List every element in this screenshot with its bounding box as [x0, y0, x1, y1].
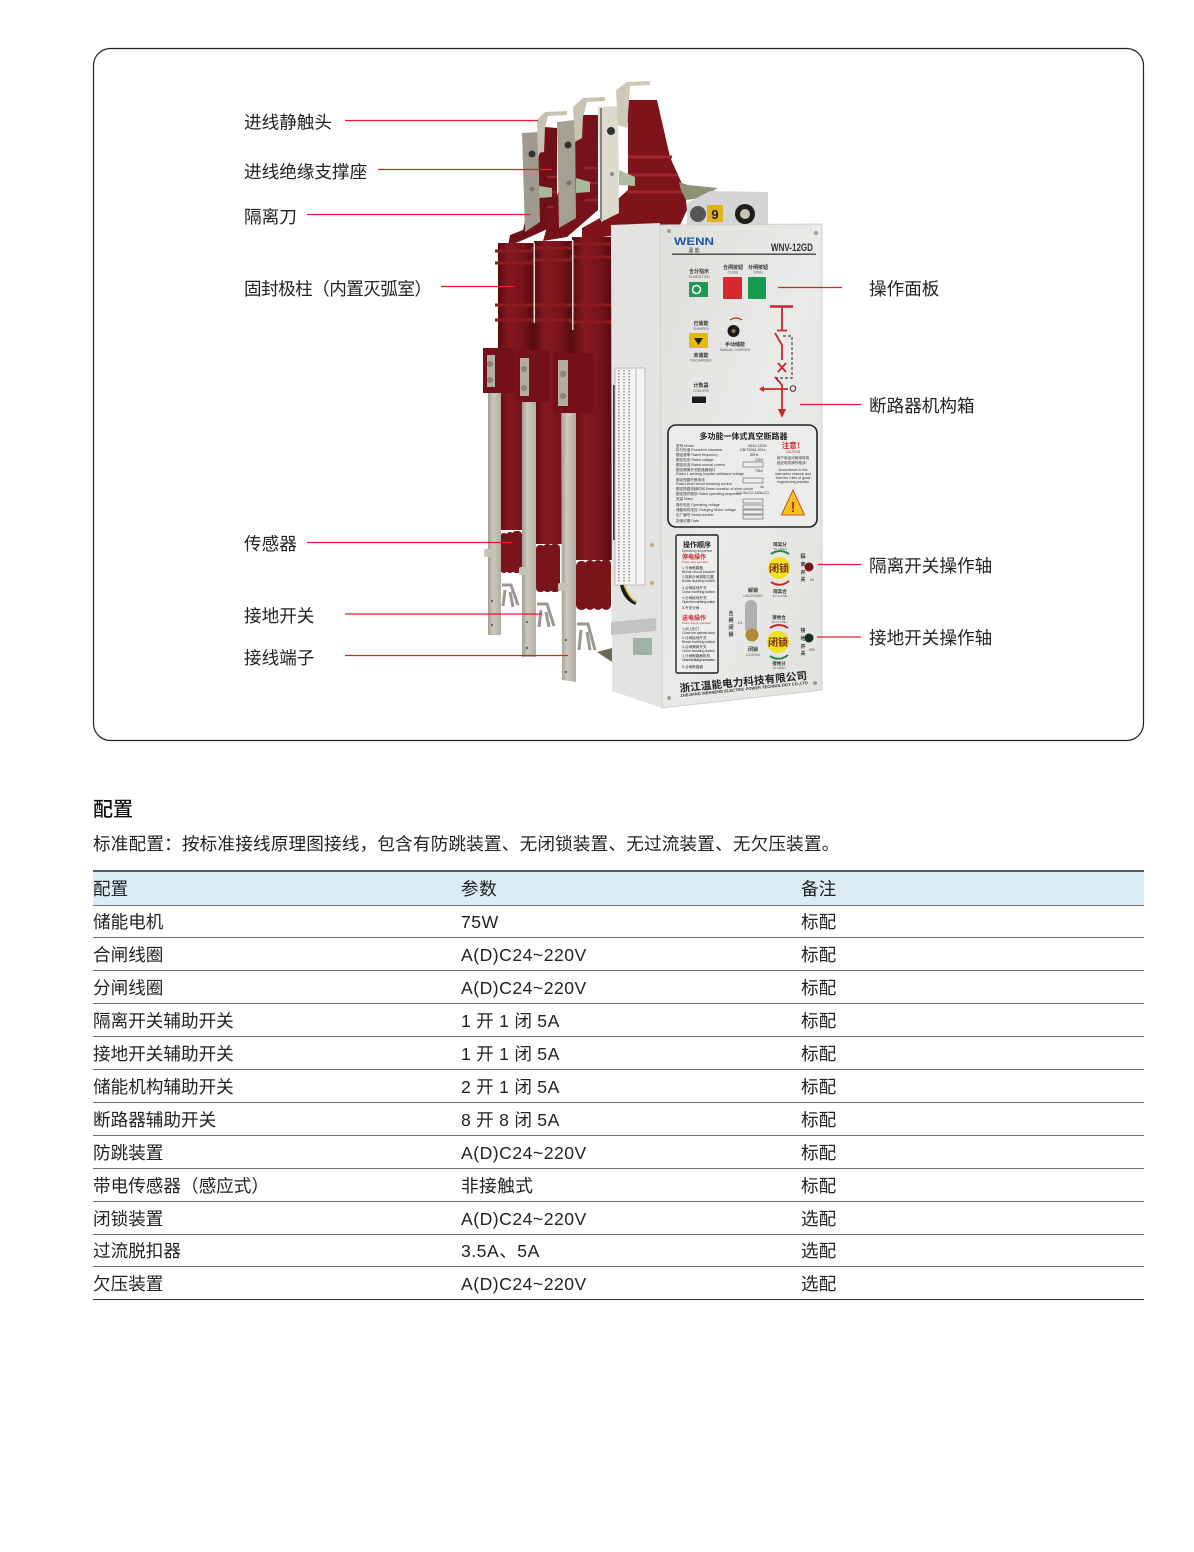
counter: 计数器 [693, 382, 709, 389]
closing interlock: LOCKING [746, 653, 761, 657]
row: 带电传感器: 非接触式 [461, 1176, 533, 1196]
nameplate: 50Hz [750, 453, 759, 457]
nameplate: 用户电话可使用现场 [777, 455, 810, 460]
operating sequence box: 4.分闸断路器机构 [682, 653, 711, 658]
operating sequence box: 3.合闸隔离开关 [682, 644, 707, 649]
nameplate: 额定短路持续时间 Rated duration of short circuit [676, 486, 753, 491]
nameplate: Accordance to the [779, 468, 807, 472]
nameplate: WNV-12GD [748, 444, 767, 448]
row: 储能机构辅助开关: 2 开 1 闭 5A [461, 1077, 560, 1097]
row: 合闸线圈: 标配 [801, 945, 836, 965]
operating sequence box: Operating sequence [682, 549, 712, 553]
callout: 接地开关操作轴: 接地开关操作轴 [869, 628, 992, 648]
earthing switch lock: TO OPEN [772, 666, 786, 670]
bellows sensor 1 [500, 531, 522, 573]
pole 3 [570, 81, 687, 610]
nameplate: 12kV [755, 458, 764, 462]
earthing switch lock: 接地合 [772, 614, 786, 621]
back plate with top knobs: 9 [711, 207, 719, 222]
model number: WNV-12GD [771, 242, 813, 254]
nameplate: 额定隔离开关断路器端口 [676, 467, 716, 472]
callout: 隔离刀: 隔离刀 [244, 207, 297, 227]
operating sequence box: 4.分闸接地开关 [682, 595, 707, 600]
row: 储能电机: 75W [461, 912, 499, 932]
manual charge knob: 手动储能 [725, 341, 745, 348]
isolating switch lock: 隔 [800, 553, 806, 560]
operating sequence box: 2.摇转分闸钥匙位置 [682, 574, 714, 579]
row: 接地开关辅助开关: 接地开关辅助开关 [93, 1044, 234, 1064]
heading: 配置: 配置 [93, 799, 133, 821]
counter [692, 382, 710, 403]
row: 闭锁装置: A(D)C24~220V [461, 1209, 587, 1229]
row: 合闸线圈: A(D)C24~220V [461, 945, 587, 965]
callout: 隔离开关操作轴: 隔离开关操作轴 [869, 556, 992, 576]
row: 防跳装置: A(D)C24~220V [461, 1143, 587, 1163]
charge indicator: DISCHARGED [690, 358, 712, 362]
back plate with top knobs [679, 182, 768, 226]
row: 过流脱扣器: 过流脱扣器 [93, 1241, 181, 1261]
charge indicator: CHARGED [693, 327, 710, 331]
callout: 断路器机构箱: 断路器机构箱 [869, 396, 975, 416]
row: 接地开关辅助开关: 1 开 1 闭 5A [461, 1044, 560, 1064]
row: 带电传感器: 标配 [801, 1176, 836, 1196]
isolating switch lock: 隔离分 [773, 541, 787, 548]
operating sequence box: Power stop operation [682, 560, 709, 564]
nameplate: instruction manual and [775, 472, 811, 476]
isolating switch lock [768, 541, 814, 598]
nameplate: 额定操作顺序 Rated operating sequence [676, 491, 741, 496]
operating sequence box [676, 535, 718, 673]
callout: 操作面板: 操作面板 [869, 279, 939, 299]
row: 闭锁装置: 选配 [801, 1209, 836, 1229]
nameplate [668, 425, 817, 527]
operating sequence box: Break isolating switch [682, 579, 715, 583]
manual charge knob: MANUAL CHARGED [720, 348, 751, 352]
pole 1 [495, 111, 567, 573]
operating sequence box: 3.合闸接地开关 [682, 585, 707, 590]
earthing switch lock: 接 [800, 627, 806, 634]
closing interlock: C1 [737, 620, 743, 625]
row: 储能电机: 储能电机 [93, 912, 163, 932]
indicator and buttons [688, 264, 768, 299]
isolating switch lock: TO CLOSE [772, 594, 788, 598]
isolating switch lock: 隔离合 [773, 588, 787, 595]
nameplate: 额定短路开断电流 [676, 477, 705, 482]
row: 隔离开关辅助开关: 隔离开关辅助开关 [93, 1011, 234, 1031]
closing interlock: 合 [728, 610, 734, 617]
nameplate: 质量 Mass [676, 496, 693, 501]
row: 断路器辅助开关: 断路器辅助开关 [93, 1110, 216, 1130]
nameplate: 储能电机电压 Charging Motor voltage [676, 507, 736, 512]
operating sequence box: Power supply operation [682, 621, 712, 625]
nameplate: 额定电压 Rated voltage [676, 457, 714, 462]
charge indicator: 未储能 [693, 352, 709, 359]
nameplate: 操作电压 Operating voltage [676, 502, 720, 507]
company name: ZHEJIANG WEHNENG ELECTRIC POWER TECHNOLOGY CO.,LTD [680, 680, 808, 698]
indicator and buttons: 合闸按钮 [723, 264, 743, 271]
earthing switch lock: 关 [800, 650, 806, 657]
operating sequence box: Close earthing switch [682, 590, 715, 594]
nameplate: 75kV [755, 469, 764, 473]
operating sequence box: Close isolating switch [682, 649, 715, 653]
row: 断路器辅助开关 [93, 1103, 1144, 1136]
row: 隔离开关辅助开关 [93, 1004, 1144, 1037]
nameplate: 出厂编号 Serial number [676, 512, 715, 517]
terminal strip and side plate [597, 223, 662, 708]
row: 隔离开关辅助开关: 1 开 1 闭 5A [461, 1011, 560, 1031]
logo: 温 能 [688, 247, 700, 254]
charge indicator: 已储能 [693, 320, 709, 327]
row: 隔离开关辅助开关: 标配 [801, 1011, 836, 1031]
company name: 浙江温能电力科技有限公司 [679, 669, 808, 695]
callout: 进线绝缘支撑座: 进线绝缘支撑座 [244, 162, 367, 182]
table header: 配置 [93, 879, 128, 899]
operating sequence box: Break earthing switch [682, 640, 715, 644]
nameplate: CAUTION [786, 450, 801, 454]
logo: WENN [674, 236, 714, 248]
operating sequence box: 1.闭上柜门 [682, 626, 700, 631]
operating sequence box: Close the cabinet door [682, 631, 716, 635]
text block: standard configuration: 标准配置：按标准接线原理图接线，包含有防跳装置、无闭锁装置、无过流装置、无欠压装置。 [93, 834, 840, 854]
nameplate: O-0.3s-CO-180s-CO [736, 491, 769, 495]
operating sequence box: 5.开关分闸 [682, 605, 700, 610]
closing interlock: 解锁 [748, 587, 758, 594]
callout: 固封极柱: 固封极柱（内置灭弧室） [244, 279, 432, 299]
closing interlock [728, 587, 763, 657]
row: 储能机构辅助开关 [93, 1070, 1144, 1103]
row: 欠压装置: A(D)C24~220V [461, 1274, 587, 1294]
nameplate: 指定电机操作程序！ [777, 460, 809, 465]
earthing switch lock: 地 [800, 635, 806, 642]
panel frame [94, 48, 1144, 740]
operating sequence box: 送电操作 [682, 614, 706, 622]
callout: 进线静触头: 进线静触头 [244, 112, 332, 132]
row: 带电传感器: 带电传感器（感应式） [93, 1176, 269, 1196]
row: 分闸线圈 [93, 971, 1144, 1004]
single-line schematic [759, 306, 796, 418]
row: 断路器辅助开关: 标配 [801, 1110, 836, 1130]
nameplate: 多功能一体式真空断路器 [700, 431, 788, 441]
row: 接地开关辅助开关: 标配 [801, 1044, 836, 1064]
row: 合闸线圈 [93, 938, 1144, 971]
table header: 参数 [461, 879, 497, 899]
row: 储能电机 [93, 905, 1144, 938]
counter: COUNTER [693, 389, 710, 393]
closing interlock: 闭 [728, 624, 734, 631]
row: 断路器辅助开关: 8 开 8 闭 5A [461, 1110, 560, 1130]
row: 闭锁装置: 闭锁装置 [93, 1209, 163, 1229]
earthing switch lock: TO CLOSE [771, 620, 787, 624]
nameplate: ! [790, 499, 796, 516]
row: 过流脱扣器 [93, 1234, 1144, 1267]
earthing switch lock: 开 [800, 644, 806, 650]
bellows sensor 3 [576, 559, 611, 610]
row: 欠压装置: 选配 [801, 1274, 836, 1294]
pole 2 [531, 97, 605, 592]
bellows sensor 2 [536, 544, 560, 592]
row: 储能电机: 标配 [801, 912, 836, 932]
isolating switch lock: 开 [800, 570, 806, 576]
indicator and buttons: 分闸按钮 [748, 264, 768, 271]
earthing switch lock: 接地分 [772, 660, 786, 667]
earthing switch lock [767, 614, 815, 670]
isolating switch lock: 离 [800, 561, 806, 568]
closing interlock: UNLOCKING [744, 594, 763, 598]
nameplate: 额定频率 Rated frequency [676, 452, 718, 457]
row: 欠压装置: 欠压装置 [93, 1274, 163, 1294]
row: 欠压装置 [93, 1267, 1144, 1300]
nameplate: GB/T1984-2014 [740, 448, 766, 452]
charge indicator [689, 320, 712, 362]
busbars and clamps [483, 348, 595, 682]
nameplate: 注意！ [782, 440, 804, 450]
operating sequence box: Open the earthing switch [682, 600, 715, 604]
operating sequence box: 5.合闸断路器 [682, 664, 703, 669]
operating sequence box: 2.分闸接地开关 [682, 635, 707, 640]
nameplate: Rated 1 sensing impulse withstand voltage [676, 472, 744, 476]
illustration: vacuum circuit breaker [483, 81, 822, 708]
isolating switch lock: 闭锁 [769, 562, 789, 575]
row: 过流脱扣器: 选配 [801, 1241, 836, 1261]
operating sequence box: 操作顺序 [683, 540, 711, 549]
row: 分闸线圈: A(D)C24~220V [461, 978, 587, 998]
logo [674, 236, 714, 254]
panel: product diagram [92, 48, 1144, 742]
earthing switch lock: 闭锁 [768, 636, 788, 649]
indicator and buttons: OPEN [753, 270, 763, 274]
isolating switch lock: TO OPEN [773, 547, 787, 551]
row: 防跳装置: 防跳装置 [93, 1143, 163, 1163]
indicator and buttons: CLOSE [728, 270, 738, 274]
row: 储能机构辅助开关: 储能机构辅助开关 [93, 1077, 234, 1097]
operating sequence box: Close the driving mechanism [682, 658, 715, 662]
nameplate: 执行标准 Executive standard [676, 447, 722, 452]
isolating switch lock: IS [810, 577, 814, 582]
indicator and buttons: 合分指示 [689, 268, 709, 275]
nameplate: 4s [760, 485, 764, 489]
row: 分闸线圈: 分闸线圈 [93, 978, 163, 998]
row: 带电传感器 [93, 1169, 1144, 1202]
row: 防跳装置 [93, 1136, 1144, 1169]
nameplate: Rated short circuit breaking current [676, 482, 732, 486]
nameplate: engineering practice [777, 480, 809, 484]
row: 防跳装置: 标配 [801, 1143, 836, 1163]
operating sequence box: 停电操作 [682, 553, 706, 561]
closing interlock: 闸 [728, 617, 734, 624]
operating sequence box: 1.分闸断路器 [682, 565, 703, 570]
row: 闭锁装置 [93, 1202, 1144, 1235]
manual charge knob [720, 318, 751, 352]
table header: 备注 [801, 879, 836, 899]
nameplate: 型号 Model [676, 443, 694, 448]
row: 合闸线圈: 合闸线圈 [93, 945, 163, 965]
indicator and buttons: S/I INDICTION [688, 275, 710, 279]
callout: 接线端子: 接线端子 [244, 648, 314, 668]
operating panel [660, 224, 822, 708]
table header [93, 870, 1144, 906]
row: 接地开关辅助开关 [93, 1037, 1144, 1070]
closing interlock: 锁 [728, 631, 734, 638]
nameplate: 制造日期 Date [676, 518, 699, 523]
earthing switch lock: ES [809, 647, 815, 652]
nameplate: 额定电流 Rated normal current [676, 462, 725, 467]
row: 过流脱扣器: 3.5A、5A [461, 1241, 540, 1261]
callout: 接地开关: 接地开关 [244, 606, 314, 626]
nameplate: flow the rules of good [776, 476, 810, 480]
isolating switch lock: 关 [800, 576, 806, 583]
row: 分闸线圈: 标配 [801, 978, 836, 998]
operating sequence box: Break circuit breaker [682, 570, 716, 574]
callout: 传感器: 传感器 [244, 534, 297, 554]
closing interlock: 闭锁 [748, 646, 758, 653]
row: 储能机构辅助开关: 标配 [801, 1077, 836, 1097]
